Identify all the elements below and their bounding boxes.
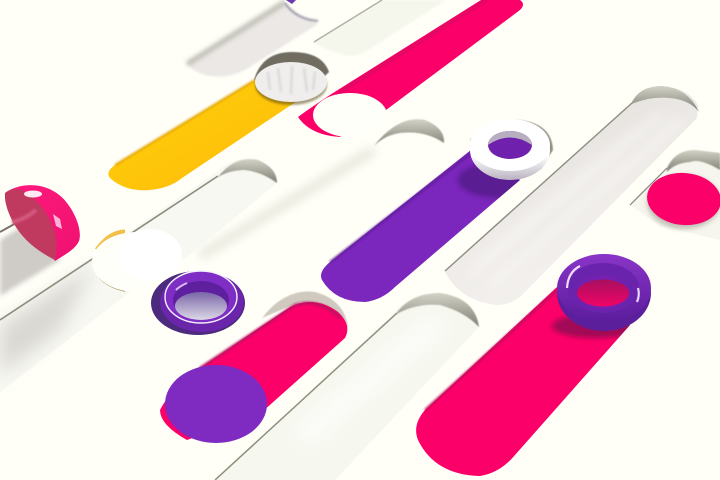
right edge slot with pink disk: [630, 150, 720, 240]
lower-left pink slot with purple disk: [160, 292, 348, 443]
top white disk: [285, 0, 352, 21]
bottom pale slot: [215, 293, 479, 480]
hidden white slot, centre: [200, 119, 444, 256]
purple disk: [165, 365, 267, 443]
yellow slot: [108, 52, 329, 190]
top pink slot with white disk: [298, 0, 523, 137]
centre purple slot: [321, 119, 553, 302]
white ring: [470, 119, 550, 180]
top silver slot: [187, 0, 352, 77]
yellow sliver: [313, 94, 345, 118]
textured silver disk: [255, 62, 327, 105]
slot wall: [254, 52, 329, 100]
top pale slot: [313, 0, 446, 56]
glossy purple torus: [557, 254, 651, 331]
lower-right pink slot with torus: [416, 254, 651, 476]
pink hemisphere: [5, 185, 80, 261]
small purple torus in recess: [151, 271, 245, 335]
pink disk: [645, 170, 720, 229]
left slot behind hemisphere: [0, 185, 80, 296]
long brushed silver slot: [445, 86, 699, 305]
rim wall: [470, 120, 553, 170]
left long white slot: [0, 159, 277, 392]
white disk: [92, 229, 182, 292]
white disk: [313, 93, 387, 137]
